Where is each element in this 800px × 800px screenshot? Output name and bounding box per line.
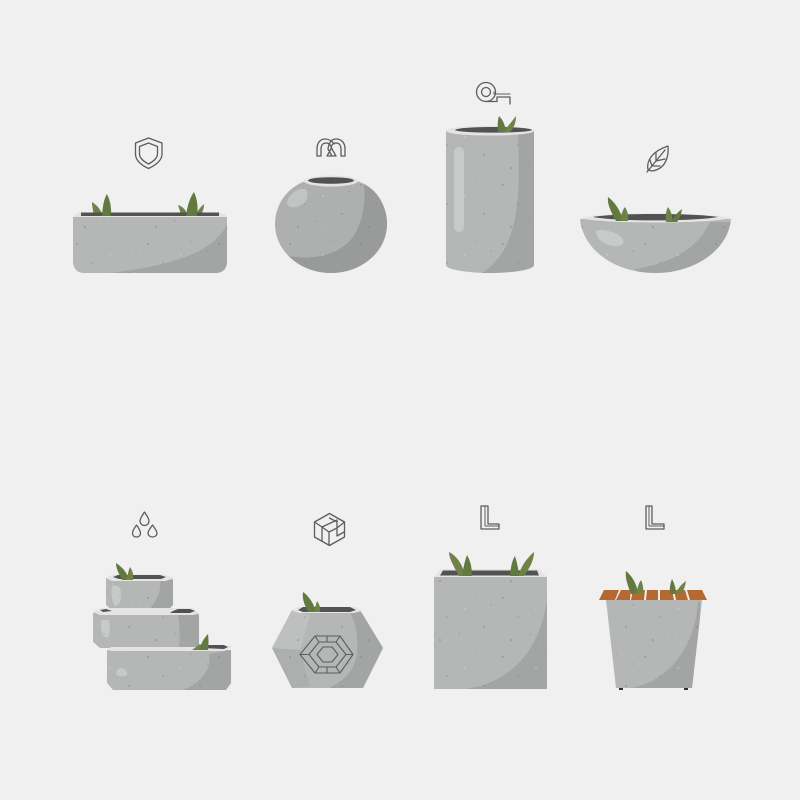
planter: shallow bowl [580, 197, 735, 276]
plant [608, 197, 682, 222]
icon: shield [136, 138, 162, 168]
icon: L bracket right [646, 506, 664, 529]
planter: large square [434, 552, 547, 689]
plant [303, 592, 320, 612]
plant [449, 552, 534, 576]
planter: long rectangular trough [73, 192, 227, 273]
feet [619, 688, 688, 690]
icon: water drops [132, 512, 157, 537]
rim and opening [446, 116, 534, 136]
rim and opening [580, 214, 731, 222]
planter: stacked hexagons [93, 563, 231, 690]
plant [626, 571, 686, 594]
wooden slats [599, 590, 707, 600]
icon: leaf [647, 146, 668, 172]
gem engraving [300, 636, 353, 673]
icon: hose reel [476, 82, 510, 104]
bottom pot [107, 634, 231, 690]
planter: tall cylinder [446, 116, 540, 277]
highlight [287, 189, 307, 207]
plant bottom [192, 634, 208, 650]
icon: arches [317, 139, 345, 156]
icon: L bracket left [481, 506, 499, 529]
plant [92, 192, 204, 216]
middle pot [93, 608, 199, 648]
top pot [106, 563, 173, 612]
planter: tapered with wooden slats [599, 571, 707, 690]
rim and opening [292, 607, 361, 613]
planter: round sphere [275, 176, 387, 273]
icon: cube [314, 514, 344, 546]
highlight [596, 230, 623, 246]
infographic: concrete planters with icons [73, 82, 731, 690]
highlight [454, 147, 464, 232]
planter: faceted hexagon with gem [272, 592, 385, 690]
rim and opening [304, 176, 358, 186]
